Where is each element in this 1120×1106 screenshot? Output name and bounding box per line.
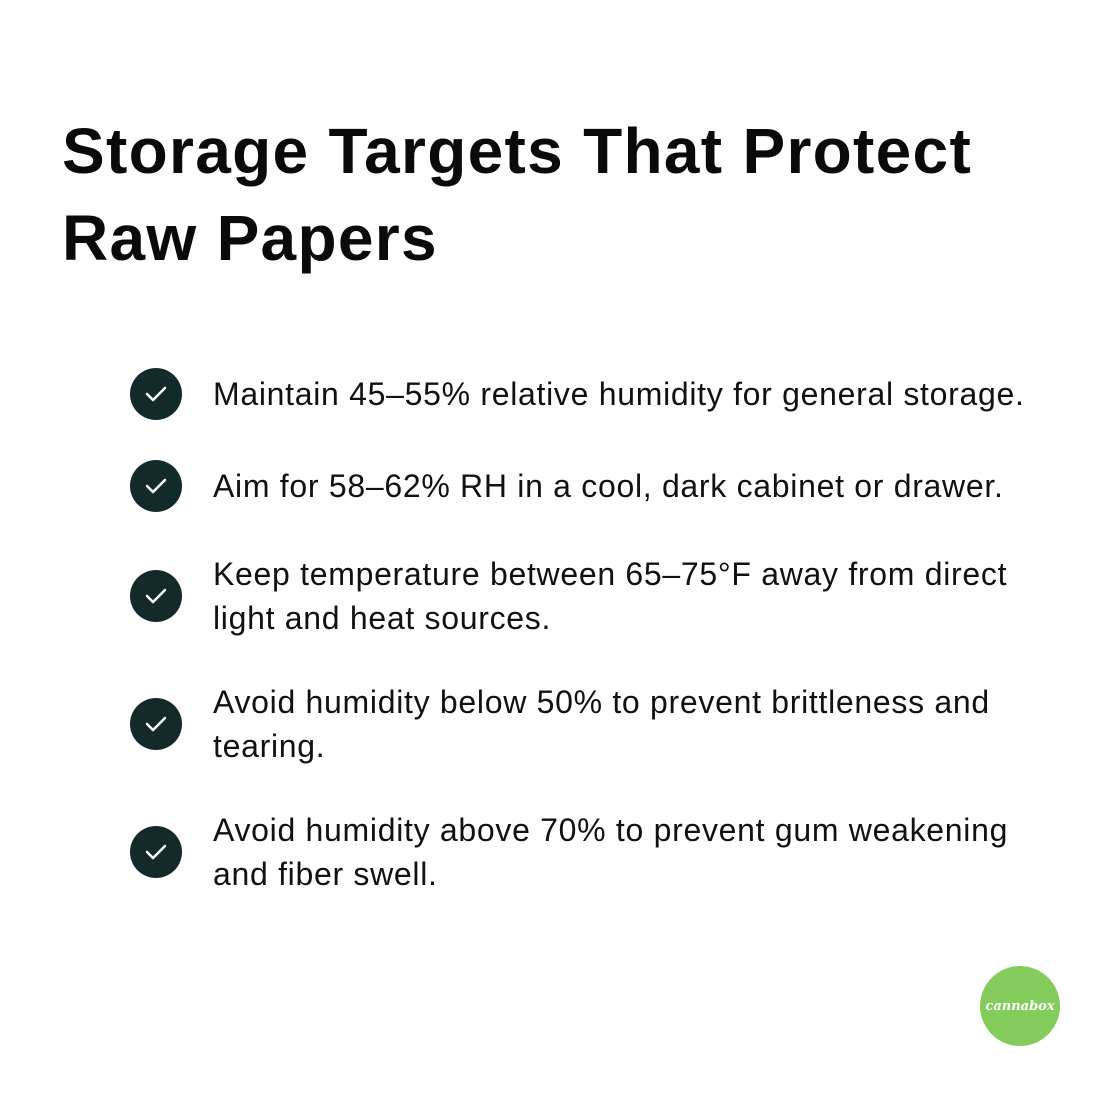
title: Raw Papers [62, 202, 438, 274]
text: Maintain 45–55% relative humidity for general storage. [213, 376, 1025, 412]
text [213, 812, 1008, 892]
icon: check [130, 570, 182, 622]
text: Avoid humidity below 50% to prevent brittleness and [213, 684, 990, 720]
text [213, 556, 1007, 636]
item 1 [130, 368, 1025, 420]
text: Keep temperature between 65–75°F away from direct [213, 556, 1007, 592]
logo: cannabox [985, 998, 1055, 1014]
item 5 [130, 812, 1008, 892]
icon: check [130, 368, 182, 420]
icon: check [130, 460, 182, 512]
text [213, 684, 990, 764]
title: Storage Targets That Protect [62, 115, 972, 187]
title [62, 115, 972, 274]
icon: check [130, 698, 182, 750]
item 2 [130, 460, 1004, 512]
text: and fiber swell. [213, 856, 438, 892]
icon: check [130, 826, 182, 878]
item 4 [130, 684, 990, 764]
item 3 [130, 556, 1007, 636]
text: Aim for 58–62% RH in a cool, dark cabinet or drawer. [213, 468, 1004, 504]
text: tearing. [213, 728, 325, 764]
text: light and heat sources. [213, 600, 551, 636]
text: Avoid humidity above 70% to prevent gum weakening [213, 812, 1008, 848]
logo [980, 966, 1060, 1046]
